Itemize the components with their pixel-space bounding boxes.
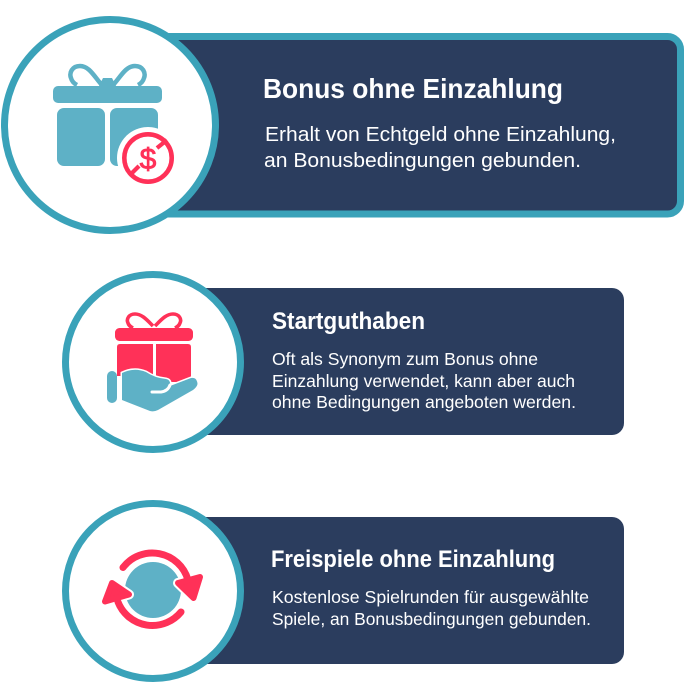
icon: no money sign <box>117 127 179 189</box>
icon: coin <box>125 562 181 618</box>
panel: Bonus ohne Einzahlung <box>4 20 680 230</box>
description: ohne Bedingungen angeboten werden. <box>272 392 576 412</box>
badge circle <box>66 504 240 678</box>
panel: Freispiele ohne Einzahlung <box>66 504 624 678</box>
description <box>264 124 616 172</box>
description: Erhalt von Echtgeld ohne Einzahlung, <box>265 124 616 146</box>
description: Kostenlose Spielrunden für ausgewählte <box>272 587 589 607</box>
icon badge: spins <box>66 504 240 678</box>
description <box>272 349 576 412</box>
badge circle <box>4 20 216 230</box>
description: Oft als Synonym zum Bonus ohne <box>272 349 538 369</box>
panel: Startguthaben <box>66 274 624 450</box>
icon: circular arrows <box>105 553 200 625</box>
heading: Startguthaben <box>272 308 425 335</box>
description: Spiele, an Bonusbedingungen gebunden. <box>272 609 591 629</box>
panel background <box>150 517 624 664</box>
icon badge: gift on hand <box>66 274 240 450</box>
heading: Freispiele ohne Einzahlung <box>271 546 555 573</box>
icon badge: gift with no money <box>4 20 216 230</box>
heading: Bonus ohne Einzahlung <box>263 73 563 104</box>
icon: red gift box <box>115 314 193 382</box>
description: an Bonusbedingungen gebunden. <box>264 150 581 172</box>
badge circle <box>66 274 240 450</box>
icon: gift box <box>53 66 162 166</box>
icon: no money sign: $ <box>140 143 157 176</box>
icon: open hand <box>107 370 198 411</box>
panel background <box>150 288 624 435</box>
description <box>272 587 591 629</box>
description: Einzahlung verwendet, kann aber auch <box>272 371 575 391</box>
panel background <box>120 36 680 214</box>
